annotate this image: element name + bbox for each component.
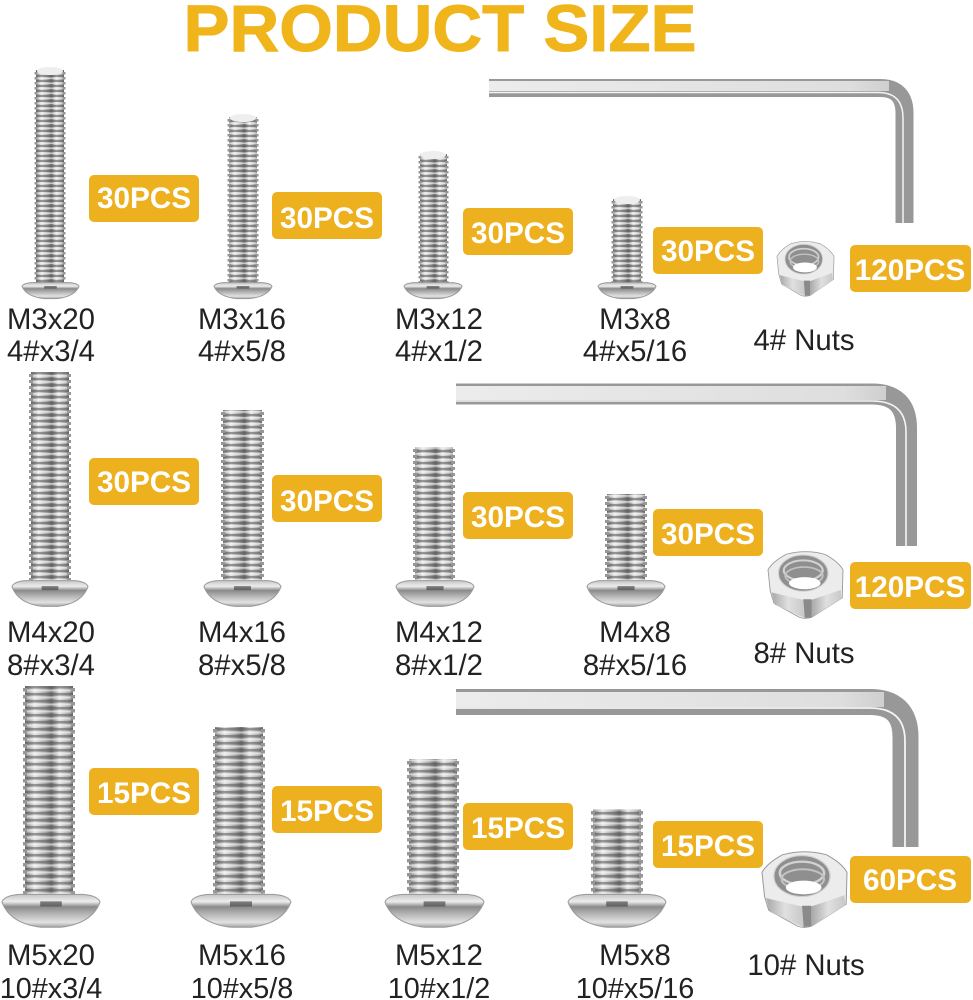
badge: M3x20 quantity: 30PCS [97, 182, 191, 215]
badge: M4x16 quantity [272, 475, 382, 522]
label: M4x20: 8#x3/4 [7, 649, 95, 682]
badge: M4x8 quantity: 30PCS [661, 518, 755, 551]
screw: M4x20 [12, 372, 88, 606]
label: 4# Nuts: 4# Nuts [754, 324, 854, 357]
screw: M4x16 [204, 410, 281, 606]
screw: M3x20 [22, 67, 79, 299]
label: M5x20: M5x20 [7, 939, 95, 972]
hex key: row 3 [456, 692, 906, 847]
badge: M5x20 quantity: 15PCS [97, 777, 191, 810]
badge: M5x12 quantity [463, 803, 573, 850]
nut: 10# [762, 852, 847, 927]
screw: M5x8 [568, 809, 666, 927]
label: M3x16: 4#x5/8 [198, 335, 286, 368]
screw: M5x12 [385, 759, 484, 927]
screw: M3x16 [214, 114, 272, 299]
hex key: row 1 [489, 81, 904, 223]
badge: M5x16 quantity: 15PCS [280, 795, 374, 828]
badge: M4x8 quantity [653, 509, 763, 556]
screw: M3x12 [404, 151, 462, 299]
label: 10# Nuts: 10# Nuts [747, 949, 865, 982]
label: M3x12: 4#x1/2 [395, 335, 483, 368]
screw: M5x20 [2, 686, 100, 927]
hex key: row 2 [456, 386, 906, 546]
badge: 10# nuts quantity: 60PCS [863, 864, 957, 897]
badge: 4# nuts quantity [850, 245, 971, 292]
label: M3x16: M3x16 [198, 303, 286, 336]
screw: M5x16 [191, 727, 291, 927]
label: M5x8: M5x8 [599, 939, 671, 972]
badge: M3x8 quantity: 30PCS [661, 235, 755, 268]
label: M4x16: M4x16 [198, 616, 286, 649]
badge: M3x16 quantity: 30PCS [280, 202, 374, 235]
badge: 8# nuts quantity [850, 562, 971, 609]
label: M4x16: 8#x5/8 [198, 649, 286, 682]
badge: M3x8 quantity [653, 227, 763, 274]
label: M5x12: M5x12 [395, 939, 483, 972]
badge: M5x8 quantity: 15PCS [661, 830, 755, 863]
badge: M3x20 quantity [89, 175, 199, 222]
screw: M4x12 [396, 447, 474, 606]
badge: 4# nuts quantity: 120PCS [855, 254, 965, 287]
badge: M5x20 quantity [89, 768, 199, 815]
label: M3x12: M3x12 [395, 303, 483, 336]
screw: M4x8 [587, 494, 665, 606]
label: M3x20: M3x20 [7, 303, 95, 336]
label: M3x8: 4#x5/16 [583, 335, 687, 368]
label: M4x12: 8#x1/2 [395, 649, 483, 682]
badge: M4x12 quantity [463, 492, 573, 539]
label: M4x8: 8#x5/16 [583, 649, 687, 682]
label: M4x20: M4x20 [7, 616, 95, 649]
badge: M4x20 quantity [89, 458, 199, 505]
badge: M3x12 quantity [463, 208, 573, 255]
label: M3x8: M3x8 [599, 303, 671, 336]
badge: M5x8 quantity [653, 821, 763, 868]
badge: M5x12 quantity: 15PCS [471, 812, 565, 845]
badge: M3x12 quantity: 30PCS [471, 217, 565, 250]
label: M3x20: 4#x3/4 [7, 335, 95, 368]
nut: 8# [768, 552, 843, 618]
label: M4x8: M4x8 [599, 616, 671, 649]
badge: M4x20 quantity: 30PCS [97, 466, 191, 499]
badge: M5x16 quantity [272, 786, 382, 833]
badge: 8# nuts quantity: 120PCS [855, 571, 965, 604]
badge: M4x16 quantity: 30PCS [280, 485, 374, 518]
badge: M4x12 quantity: 30PCS [471, 501, 565, 534]
label: 8# Nuts: 8# Nuts [754, 637, 854, 670]
screw: M3x8 [598, 196, 656, 299]
label: M4x12: M4x12 [395, 616, 483, 649]
nut: 4# [777, 242, 834, 296]
badge: M3x16 quantity [272, 192, 382, 239]
label: M5x16: M5x16 [198, 939, 286, 972]
badge: 10# nuts quantity [850, 856, 971, 903]
